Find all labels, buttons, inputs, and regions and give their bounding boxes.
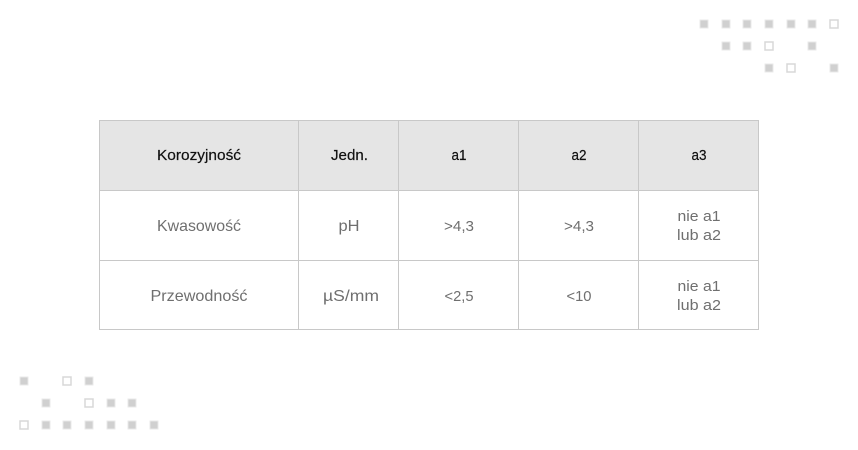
row: Kwasowość: >4,3 [564,218,594,235]
row: Przewodność: µS/mm [323,288,379,305]
row: Przewodność: <2,5 [444,288,474,305]
row: Kwasowość [157,208,721,244]
decoration: bottom-left square pattern [20,377,158,429]
header row: Jedn. [331,147,368,164]
row: Przewodność: lub a2 [677,297,721,314]
row: Kwasowość: pH [338,218,360,235]
row: Kwasowość: lub a2 [677,227,721,244]
row: Przewodność: nie a1 [678,278,720,295]
row: Przewodność [150,278,721,314]
header row: a2 [572,147,586,164]
table header background [99,120,759,190]
header row: Korozyjność [157,147,242,164]
row: Kwasowość: nie a1 [678,208,720,225]
header row: a1 [452,147,466,164]
row: Kwasowość: >4,3 [444,218,474,235]
row: Kwasowość: Kwasowość [157,218,241,235]
header row: a3 [692,147,706,164]
decoration: top-right square pattern [700,20,838,72]
header row [157,147,706,164]
table grid [100,120,758,330]
table [99,120,759,330]
row: Przewodność: Przewodność [150,288,248,305]
row: Przewodność: <10 [566,288,592,305]
